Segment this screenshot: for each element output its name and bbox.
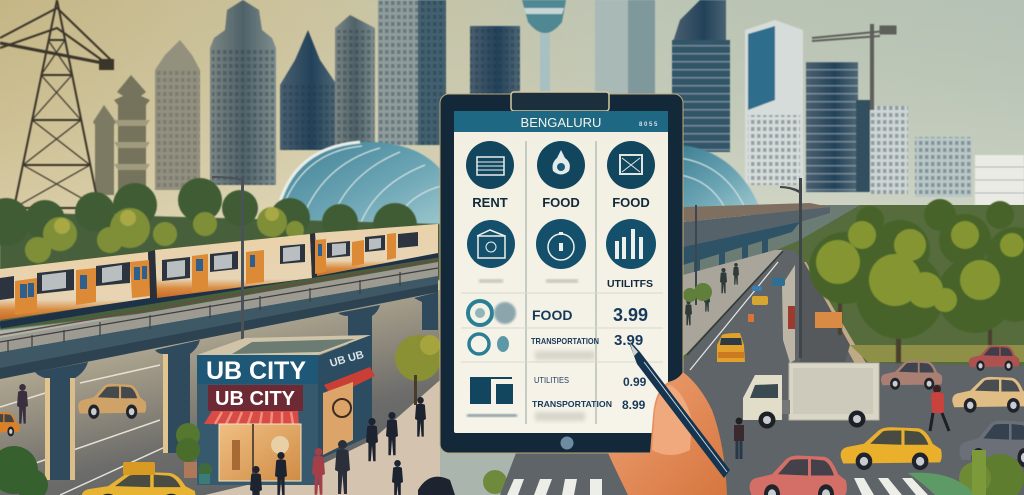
- hand: [608, 372, 727, 495]
- header status marks: 8 0 5 5: [639, 122, 658, 128]
- pedestrian dark: [734, 418, 744, 459]
- lamp post: [212, 177, 244, 355]
- label: FOOD: [612, 195, 650, 210]
- pedestrian in red: [930, 385, 949, 431]
- side sign: UB UB: [329, 349, 365, 370]
- foreground plants: [908, 450, 1024, 495]
- sky: [0, 0, 1024, 300]
- observation spire: [522, 0, 566, 98]
- shop window: [219, 424, 301, 481]
- stylus: [630, 342, 730, 478]
- pedestrians on far pavement: [683, 263, 739, 325]
- glass tower: [378, 0, 446, 145]
- tree and lawn background: [683, 205, 1024, 370]
- label: RENT: [472, 195, 508, 210]
- vehicles and people, left street: [0, 384, 507, 495]
- tan car: [78, 384, 146, 419]
- potted plants: [176, 423, 212, 484]
- road: [500, 250, 1024, 495]
- railing: [0, 254, 438, 352]
- blur smear: [535, 351, 595, 360]
- tablet showing Bengaluru cost breakdown: [440, 92, 683, 453]
- pavement near shop: [205, 380, 440, 495]
- home button: [560, 436, 574, 450]
- UB City shop: UB CITY: [215, 388, 296, 410]
- large trees: [809, 199, 1024, 363]
- crowd near shop: [250, 397, 455, 495]
- clip: [511, 92, 609, 111]
- main sign: [197, 355, 318, 384]
- train windows: [0, 232, 418, 300]
- lamp posts: [695, 178, 802, 358]
- row value: 8.99: [622, 398, 646, 412]
- row value: 0.99: [623, 375, 647, 389]
- timer icon: [536, 219, 586, 269]
- right dome: [680, 145, 760, 208]
- grey tower: [335, 15, 375, 150]
- centre-right tower: [595, 0, 655, 98]
- label: FOOD: [542, 195, 580, 210]
- bush: [0, 446, 48, 495]
- hand holding a stylus: [608, 342, 730, 495]
- pedestrian: [17, 384, 28, 424]
- row icon: bins: [470, 378, 513, 404]
- road under the viaduct: [0, 290, 440, 495]
- right side street scene: [500, 178, 1024, 495]
- finger and nail: [652, 385, 692, 455]
- pillars: [35, 292, 438, 480]
- row icon: rings small: [469, 334, 509, 354]
- navy tower: [806, 62, 871, 192]
- pink car: [750, 456, 847, 495]
- side window: [323, 382, 353, 455]
- orange car: [0, 412, 19, 436]
- tree band behind the train, left: [0, 178, 440, 330]
- row value: 3.99: [613, 305, 648, 325]
- tower crane, right: [812, 24, 896, 110]
- side awning: [324, 367, 375, 397]
- white slab tower: [870, 106, 908, 194]
- mid tower: [470, 26, 520, 98]
- hazy tower left: [155, 40, 200, 190]
- parked cars: [881, 360, 942, 390]
- title: BENGALURU: [521, 115, 601, 130]
- blurred caption: [479, 279, 503, 283]
- grey tower with crown: [210, 0, 276, 185]
- row icon: rings: [468, 301, 516, 325]
- median: [782, 265, 795, 363]
- delivery truck: [743, 363, 879, 428]
- deck: [0, 276, 438, 379]
- dark spired tower: [280, 30, 337, 150]
- maroon sign: [208, 385, 303, 411]
- left dome: [275, 142, 445, 225]
- pagoda towers: [93, 75, 150, 195]
- side wall: [318, 335, 372, 460]
- UB City shop: [176, 335, 375, 485]
- small yellow car: [717, 333, 745, 362]
- screen header: [454, 111, 668, 132]
- metro station glass domes: [275, 142, 760, 225]
- white tower with blue glass: [745, 20, 803, 185]
- crosswalk: [507, 478, 928, 495]
- blur smear: [535, 412, 585, 421]
- shop front wall: [197, 355, 319, 485]
- blurred caption: [467, 414, 517, 417]
- distant cars and orange barrier: [748, 278, 842, 329]
- row label: UTILITIES: [534, 375, 569, 385]
- train: [0, 224, 438, 320]
- skyline buildings: [0, 0, 1024, 208]
- UB City shop: UB CITY: [206, 357, 306, 385]
- lattice pylon and crane, left: [0, 0, 113, 208]
- dark blue tower: [672, 0, 730, 152]
- tablet body: [440, 94, 683, 453]
- lawn strip: [850, 345, 1024, 362]
- row label: FOOD: [532, 307, 572, 323]
- row value: 3.99: [614, 332, 643, 349]
- blurred caption: [546, 279, 578, 283]
- sidewalk strip: [800, 262, 866, 364]
- rent icon: [466, 141, 514, 189]
- yellow car: [841, 427, 942, 470]
- housing icon: [467, 220, 515, 268]
- elevated metro viaduct: [0, 224, 438, 480]
- plant at base of tablet: [483, 470, 507, 494]
- bar chart icon: [606, 219, 656, 269]
- screen: [454, 111, 668, 433]
- row label: TRANSPORTATION: [532, 399, 612, 409]
- right elevated viaduct: [683, 203, 830, 290]
- taxi with roof sign: [82, 462, 196, 495]
- roof: [197, 335, 371, 355]
- food icon 2: [607, 141, 655, 189]
- right towers: [915, 137, 1024, 205]
- label: UTILITFS: [607, 278, 653, 290]
- front awning: [204, 411, 299, 425]
- pavement: [683, 250, 783, 356]
- small tree by shop: [395, 335, 441, 405]
- grid lines: [526, 141, 596, 424]
- row label: TRANSPORTATION: [531, 336, 599, 346]
- food icon: [537, 141, 585, 189]
- train doors: [15, 233, 396, 315]
